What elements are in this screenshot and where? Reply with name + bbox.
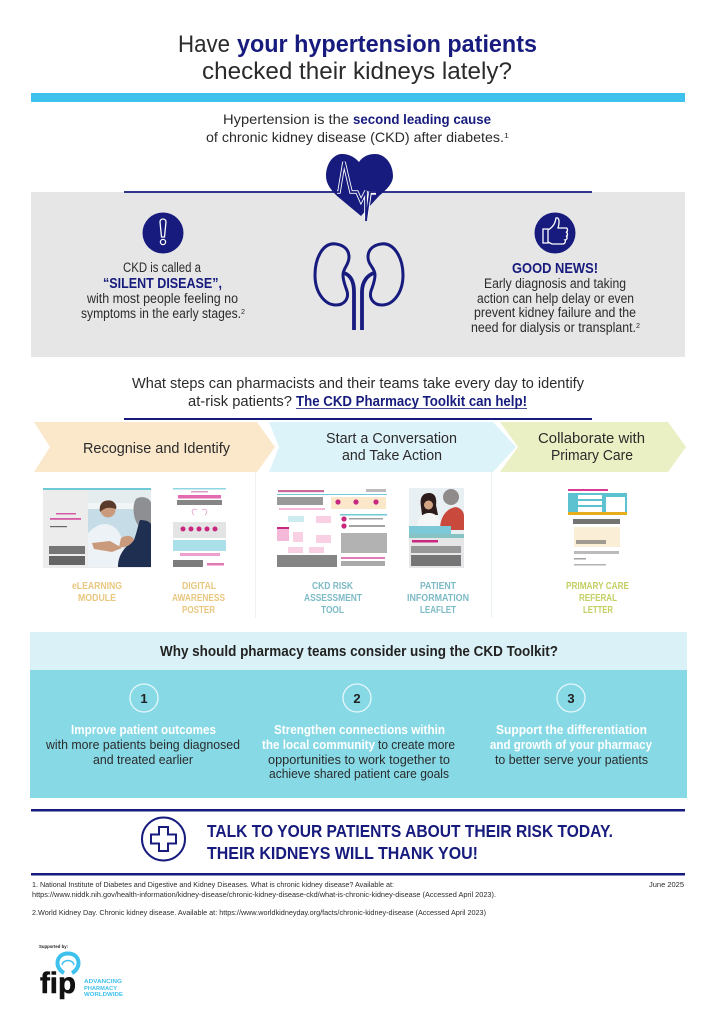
reason 1: and treated earlier xyxy=(93,753,193,767)
fip logo: Supported by: xyxy=(39,944,68,949)
label: primary care referal letter: REFERAL xyxy=(579,593,617,604)
text: good news: prevent kidney failure and the xyxy=(474,305,636,320)
footnotes: 2.World Kidney Day. Chronic kidney disease. Available at: https://www.worldkidneyday.org/facts/chronic-kidney-disease (Accessed April 2023) xyxy=(32,910,486,917)
intro statement: of chronic kidney disease (CKD) after diabetes. xyxy=(206,129,504,145)
label: primary care referal letter: LETTER xyxy=(583,605,614,616)
reason 3 xyxy=(490,684,652,767)
intro statement: 1 xyxy=(504,133,509,140)
text: silent disease: with most people feeling no xyxy=(86,291,238,306)
chevron: start a conversation: and Take Action xyxy=(342,448,442,464)
label: elearning module: eLEARNING xyxy=(72,581,122,592)
panel: why toolkit heading xyxy=(30,632,687,670)
label: patient information leaflet: INFORMATION xyxy=(407,593,469,604)
footnotes: https://www.niddk.nih.gov/health-information/kidney-disease/chronic-kidney-disease-ckd/what-is-chronic-kidney-disease (Accessed April 2023). xyxy=(32,892,496,899)
chevron: collaborate with primary care: Primary Care xyxy=(551,448,633,464)
label: ckd risk assessment tool: ASSESSMENT xyxy=(304,593,362,604)
text: good news: need for dialysis or transplant. xyxy=(471,320,636,335)
fip logo xyxy=(39,944,123,1000)
reason 3: Support the differentiation xyxy=(496,723,647,737)
call to action xyxy=(207,821,613,863)
thumbnail: patient information leaflet xyxy=(409,488,464,568)
text: silent disease: 2 xyxy=(241,309,245,316)
fip logo: PHARMACY xyxy=(84,986,117,992)
panel: why toolkit heading: Why should pharmacy teams consider using the CKD Toolkit? xyxy=(160,644,558,660)
reason 3: and growth of your pharmacy xyxy=(490,738,652,752)
text: steps question: at-risk patients? xyxy=(188,394,292,410)
label: patient information leaflet: PATIENT xyxy=(420,581,456,592)
fip logo: fip xyxy=(40,967,76,1000)
chevron: collaborate with primary care xyxy=(500,422,686,472)
title xyxy=(178,31,537,85)
text: steps question: What steps can pharmacists and their teams take every day to identify xyxy=(132,376,585,392)
label: ckd risk assessment tool: TOOL xyxy=(321,605,344,616)
reason 3: 3 xyxy=(567,691,575,706)
date: June 2025 xyxy=(649,880,684,889)
icon: heart with pulse xyxy=(124,154,592,221)
chevron: recognise and identify: Recognise and Identify xyxy=(83,441,231,457)
reason 3: to better serve your patients xyxy=(495,753,648,767)
reason 2 xyxy=(262,684,455,781)
panel: reasons xyxy=(30,670,687,798)
icon: thumbs up circle xyxy=(534,212,576,254)
text: silent disease: symptoms in the early stages. xyxy=(81,306,241,321)
thumbnail: ckd risk assessment tool xyxy=(277,488,387,568)
chevron: recognise and identify xyxy=(34,422,275,472)
icon: kidneys xyxy=(315,244,403,330)
reason 2: achieve shared patient care goals xyxy=(269,767,449,781)
reason 1: Improve patient outcomes xyxy=(71,723,216,737)
fip logo: WORLDWIDE xyxy=(84,992,123,998)
label: patient information leaflet xyxy=(407,581,469,616)
text: good news: GOOD NEWS! xyxy=(512,260,598,277)
reason 1 xyxy=(45,684,240,767)
icon: medical cross xyxy=(142,818,185,860)
text: good news: action can help delay or even xyxy=(477,291,634,306)
thumbnail: primary care referral letter xyxy=(567,489,627,568)
label: elearning module: MODULE xyxy=(78,593,116,604)
fip logo: ADVANCING xyxy=(84,979,122,985)
reason 2: opportunities to work together to xyxy=(268,753,450,767)
intro statement: second leading cause xyxy=(353,111,491,127)
text: good news: 2 xyxy=(636,323,640,330)
thumbnail: digital awareness poster xyxy=(173,488,226,568)
label: ckd risk assessment tool xyxy=(304,581,362,616)
reason 2: 2 xyxy=(353,691,361,706)
icon: exclamation circle xyxy=(142,212,184,254)
call to action: TALK TO YOUR PATIENTS ABOUT THEIR RISK TODAY. xyxy=(207,821,613,841)
label: digital awareness poster: POSTER xyxy=(182,605,216,616)
footnotes: 1. National Institute of Diabetes and Digestive and Kidney Diseases. What is chronic kidney disease? Available at: xyxy=(32,882,394,889)
reason 2: to create more xyxy=(378,738,455,752)
label: primary care referal letter xyxy=(566,581,629,616)
label: primary care referal letter: PRIMARY CARE xyxy=(566,581,629,592)
chevron: start a conversation: Start a Conversation xyxy=(326,431,457,447)
label: digital awareness poster: DIGITAL xyxy=(182,581,216,592)
label: patient information leaflet: LEAFLET xyxy=(420,605,456,616)
reason 1: with more patients being diagnosed xyxy=(45,738,240,752)
intro statement: Hypertension is the xyxy=(223,111,349,127)
title: Have xyxy=(178,31,230,58)
title: your hypertension patients xyxy=(237,31,537,58)
label: digital awareness poster: AWARENESS xyxy=(172,593,225,604)
text: good news xyxy=(471,260,640,335)
text: steps question: The CKD Pharmacy Toolkit can help! xyxy=(296,394,527,410)
footnotes xyxy=(32,882,496,917)
chevron: collaborate with primary care: Collaborate with xyxy=(538,431,645,447)
text: silent disease: “SILENT DISEASE”, xyxy=(103,275,222,292)
thumbnail: elearning module xyxy=(43,488,151,568)
text: good news: Early diagnosis and taking xyxy=(484,276,626,291)
chevron: start a conversation xyxy=(269,422,516,472)
reason 1: 1 xyxy=(140,691,148,706)
call to action: THEIR KIDNEYS WILL THANK YOU! xyxy=(207,843,478,863)
intro statement xyxy=(206,111,509,145)
text: silent disease xyxy=(81,260,245,321)
text: steps question xyxy=(124,376,592,420)
cyan header bar xyxy=(31,93,685,102)
label: elearning module xyxy=(72,581,122,604)
panel: grey kidney facts xyxy=(31,192,685,357)
title: checked their kidneys lately? xyxy=(202,58,512,85)
label: ckd risk assessment tool: CKD RISK xyxy=(312,581,354,592)
text: silent disease: CKD is called a xyxy=(123,260,201,275)
reason 2: Strengthen connections within xyxy=(274,723,445,737)
label: digital awareness poster xyxy=(172,581,225,616)
reason 2: the local community xyxy=(262,738,375,752)
